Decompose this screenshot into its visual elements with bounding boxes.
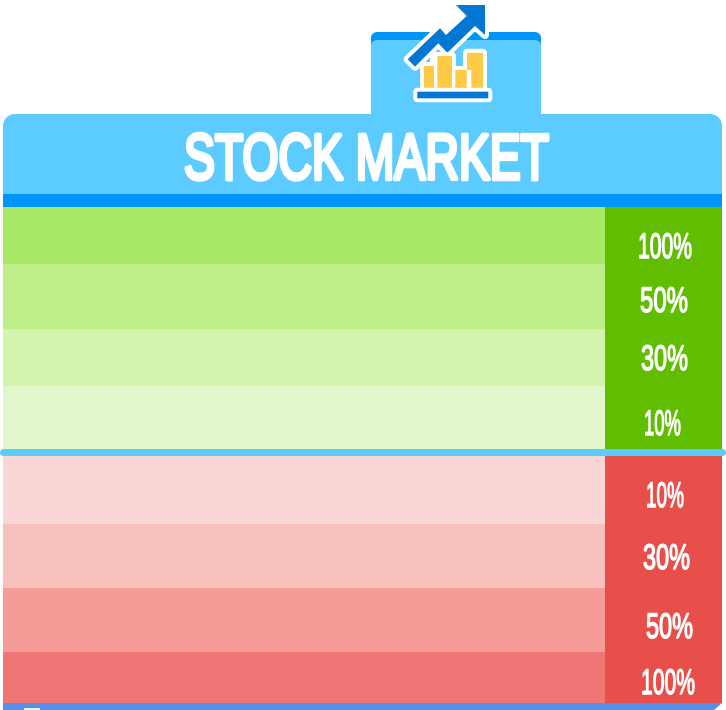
title: STOCK MARKET <box>184 121 549 193</box>
bottom band notch <box>24 708 40 710</box>
label: 10% loss: 10% <box>646 476 684 515</box>
label: 50% gain: 50% <box>640 281 688 320</box>
label: 50% loss: 50% <box>646 607 693 646</box>
label: 30% gain: 30% <box>641 339 688 378</box>
panel: gains percentages <box>605 207 722 449</box>
header underline band <box>3 194 722 207</box>
label: 10% gain: 10% <box>644 404 681 443</box>
label: 100% gain: 100% <box>638 227 692 266</box>
bottom band <box>3 703 722 710</box>
panel: gains rows <box>3 207 605 449</box>
icon: rising arrow over bar chart <box>408 5 488 98</box>
label: 30% loss: 30% <box>643 538 690 577</box>
tab behind header <box>371 32 541 116</box>
panel: losses rows <box>3 456 605 703</box>
centre divider <box>0 449 726 456</box>
header panel <box>3 114 722 194</box>
panel: losses percentages <box>605 456 722 703</box>
